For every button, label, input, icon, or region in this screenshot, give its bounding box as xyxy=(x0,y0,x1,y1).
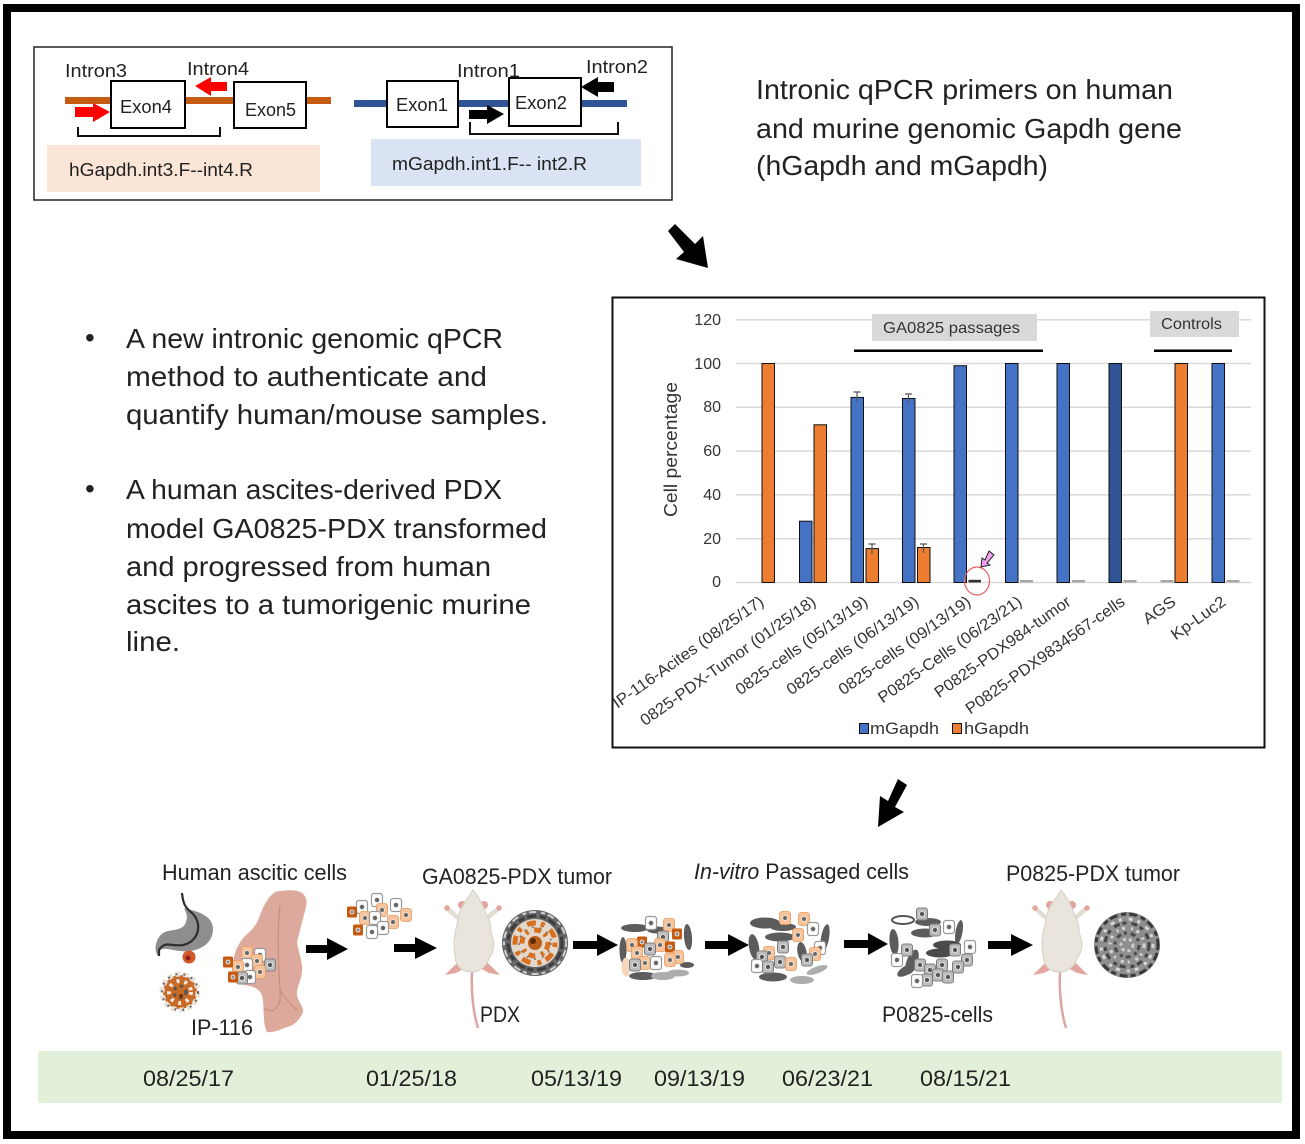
arrow 3 xyxy=(573,934,618,956)
intron labels: Intron1 xyxy=(457,61,520,81)
timeline date band: 08/15/21 xyxy=(920,1066,1011,1091)
GA0825 passages bracket xyxy=(854,350,1043,352)
exon 5 xyxy=(234,82,306,128)
heading text: Intronic qPCR primers on human xyxy=(756,74,1173,105)
y axis tick labels xyxy=(694,312,721,591)
icon: ascitic cells in abdomen xyxy=(223,946,276,984)
intron labels xyxy=(65,57,648,81)
icon: human torso with ascites xyxy=(233,890,307,1032)
bullet list: A human ascites-derived PDX xyxy=(126,474,502,505)
red forward primer arrow xyxy=(75,103,110,122)
arrow 6 xyxy=(988,934,1033,956)
bullet list: ascites to a tumorigenic murine xyxy=(126,589,531,620)
bullet list xyxy=(85,322,548,657)
step labels: P0825-cells xyxy=(882,1002,993,1027)
panel: bar chart xyxy=(610,298,1264,748)
y axis tick labels: 100 xyxy=(694,356,721,373)
human primer label: hGapdh.int3.F--int4.R xyxy=(69,160,253,180)
bullet list: A new intronic genomic qPCR xyxy=(126,323,503,354)
icon: stomach xyxy=(156,893,213,964)
intron labels: Intron4 xyxy=(187,59,249,79)
heading text: and murine genomic Gapdh gene xyxy=(756,113,1182,144)
x axis labels: 0825-cells (06/13/19) xyxy=(784,593,922,699)
y axis tick labels: 60 xyxy=(703,443,721,460)
bullet list: line. xyxy=(126,626,180,657)
arrow 5 xyxy=(844,933,888,955)
y axis tick labels: 80 xyxy=(703,399,721,416)
legend xyxy=(860,719,1029,738)
arrow: chart to timeline xyxy=(878,779,907,827)
panel: gene primer diagram xyxy=(34,47,672,200)
Controls bracket xyxy=(1154,350,1232,352)
step labels: PDX xyxy=(480,1002,520,1027)
y axis tick labels: 40 xyxy=(703,487,721,504)
human label background xyxy=(47,145,320,192)
x axis labels: 0825-PDX-Tumor (01/25/18) xyxy=(637,593,819,729)
bullet list: • xyxy=(85,322,95,353)
timeline date band: 06/23/21 xyxy=(782,1066,873,1091)
y axis title: Cell percentage xyxy=(661,382,681,517)
x axis labels: P0825-Cells (06/23/21) xyxy=(875,593,1025,707)
icon: mixed PDX tumor xyxy=(502,910,568,976)
Controls tag xyxy=(1150,311,1239,337)
step labels: Human ascitic cells xyxy=(162,860,347,885)
bullet list: method to authenticate and xyxy=(126,361,487,392)
legend: mGapdh xyxy=(870,719,939,738)
mouse gene strand xyxy=(354,100,627,107)
icon: P0825 cells xyxy=(888,908,976,988)
icon: mouse PDX xyxy=(444,890,502,1028)
icon: IP-116 cell cluster xyxy=(162,974,198,1010)
y axis tick labels: 20 xyxy=(703,531,721,548)
legend: hGapdh xyxy=(964,719,1029,738)
x axis labels xyxy=(610,593,1229,729)
mouse primer label: mGapdh.int1.F-- int2.R xyxy=(392,154,587,174)
y axis tick labels: 120 xyxy=(694,312,721,329)
highlight circle xyxy=(964,567,990,595)
timeline date band: 08/25/17 xyxy=(143,1066,234,1091)
x axis labels: 0825-cells (09/13/19) xyxy=(836,593,974,699)
arrow 2 xyxy=(394,937,437,959)
timeline date band: 05/13/19 xyxy=(531,1066,622,1091)
icon: passaged cells early xyxy=(620,916,694,980)
bullet list: model GA0825-PDX transformed xyxy=(126,513,547,544)
intron labels: Intron2 xyxy=(586,57,648,77)
panel: model timeline illustration xyxy=(156,859,1180,1040)
human amplicon bracket xyxy=(78,127,220,136)
x axis labels: P0825-PDX984-tumor xyxy=(932,593,1075,702)
x axis labels: IP-116-Acites (08/25/17) xyxy=(610,593,767,712)
heading text: (hGapdh and mGapdh) xyxy=(756,150,1048,181)
black forward primer arrow xyxy=(469,105,504,124)
human gene strand xyxy=(65,97,331,104)
bullet list: quantify human/mouse samples. xyxy=(126,399,548,430)
exon 4 xyxy=(111,81,185,128)
GA0825 passages tag: GA0825 passages xyxy=(883,320,1020,337)
exon 1 xyxy=(387,81,458,127)
arrow: primers to chart xyxy=(668,224,708,268)
mouse label background xyxy=(371,139,641,186)
exon 2: Exon2 xyxy=(515,93,567,113)
red reverse primer arrow xyxy=(195,77,227,96)
step labels: IP-116 xyxy=(191,1015,253,1040)
step labels: GA0825-PDX tumor xyxy=(422,864,612,889)
timeline date band: 09/13/19 xyxy=(654,1066,745,1091)
black reverse primer arrow xyxy=(581,77,614,97)
icon: mouse P0825 xyxy=(1032,890,1090,1028)
intron labels: Intron3 xyxy=(65,61,127,81)
exon 4: Exon4 xyxy=(120,97,172,117)
step labels: P0825-PDX tumor xyxy=(1006,861,1180,886)
heading text xyxy=(756,74,1182,181)
x axis labels: 0825-cells (05/13/19) xyxy=(733,593,871,699)
x axis labels: AGS xyxy=(1140,593,1179,628)
timeline date band xyxy=(38,1051,1282,1103)
timeline date band: 01/25/18 xyxy=(366,1066,457,1091)
step labels: In-vitro Passaged cells xyxy=(694,859,909,884)
bullet list: and progressed from human xyxy=(126,551,491,582)
exon 2 xyxy=(509,78,581,126)
y axis tick labels: 0 xyxy=(712,574,721,591)
mouse amplicon bracket xyxy=(470,122,618,134)
icon: murine tumor xyxy=(1094,912,1160,978)
bullet list: • xyxy=(85,473,95,504)
error bars xyxy=(854,392,927,554)
exon 5: Exon5 xyxy=(245,100,296,120)
arrow 4 xyxy=(705,934,749,956)
icon: isolated ascitic cells xyxy=(347,894,412,938)
exon 1: Exon1 xyxy=(396,95,448,115)
arrow 1 xyxy=(306,938,348,960)
mGapdh bars xyxy=(800,364,1224,582)
pink pointer arrow xyxy=(981,551,994,567)
hGapdh bars xyxy=(762,364,1188,582)
GA0825 passages tag xyxy=(872,314,1037,341)
x axis labels: P0825-PDX9834567-cells xyxy=(963,593,1128,718)
x axis labels: Kp-Luc2 xyxy=(1168,593,1229,644)
near-zero bars xyxy=(968,580,1240,582)
icon: passaged cells middle xyxy=(747,912,831,984)
Controls tag: Controls xyxy=(1161,316,1222,333)
step labels xyxy=(162,859,1180,1040)
